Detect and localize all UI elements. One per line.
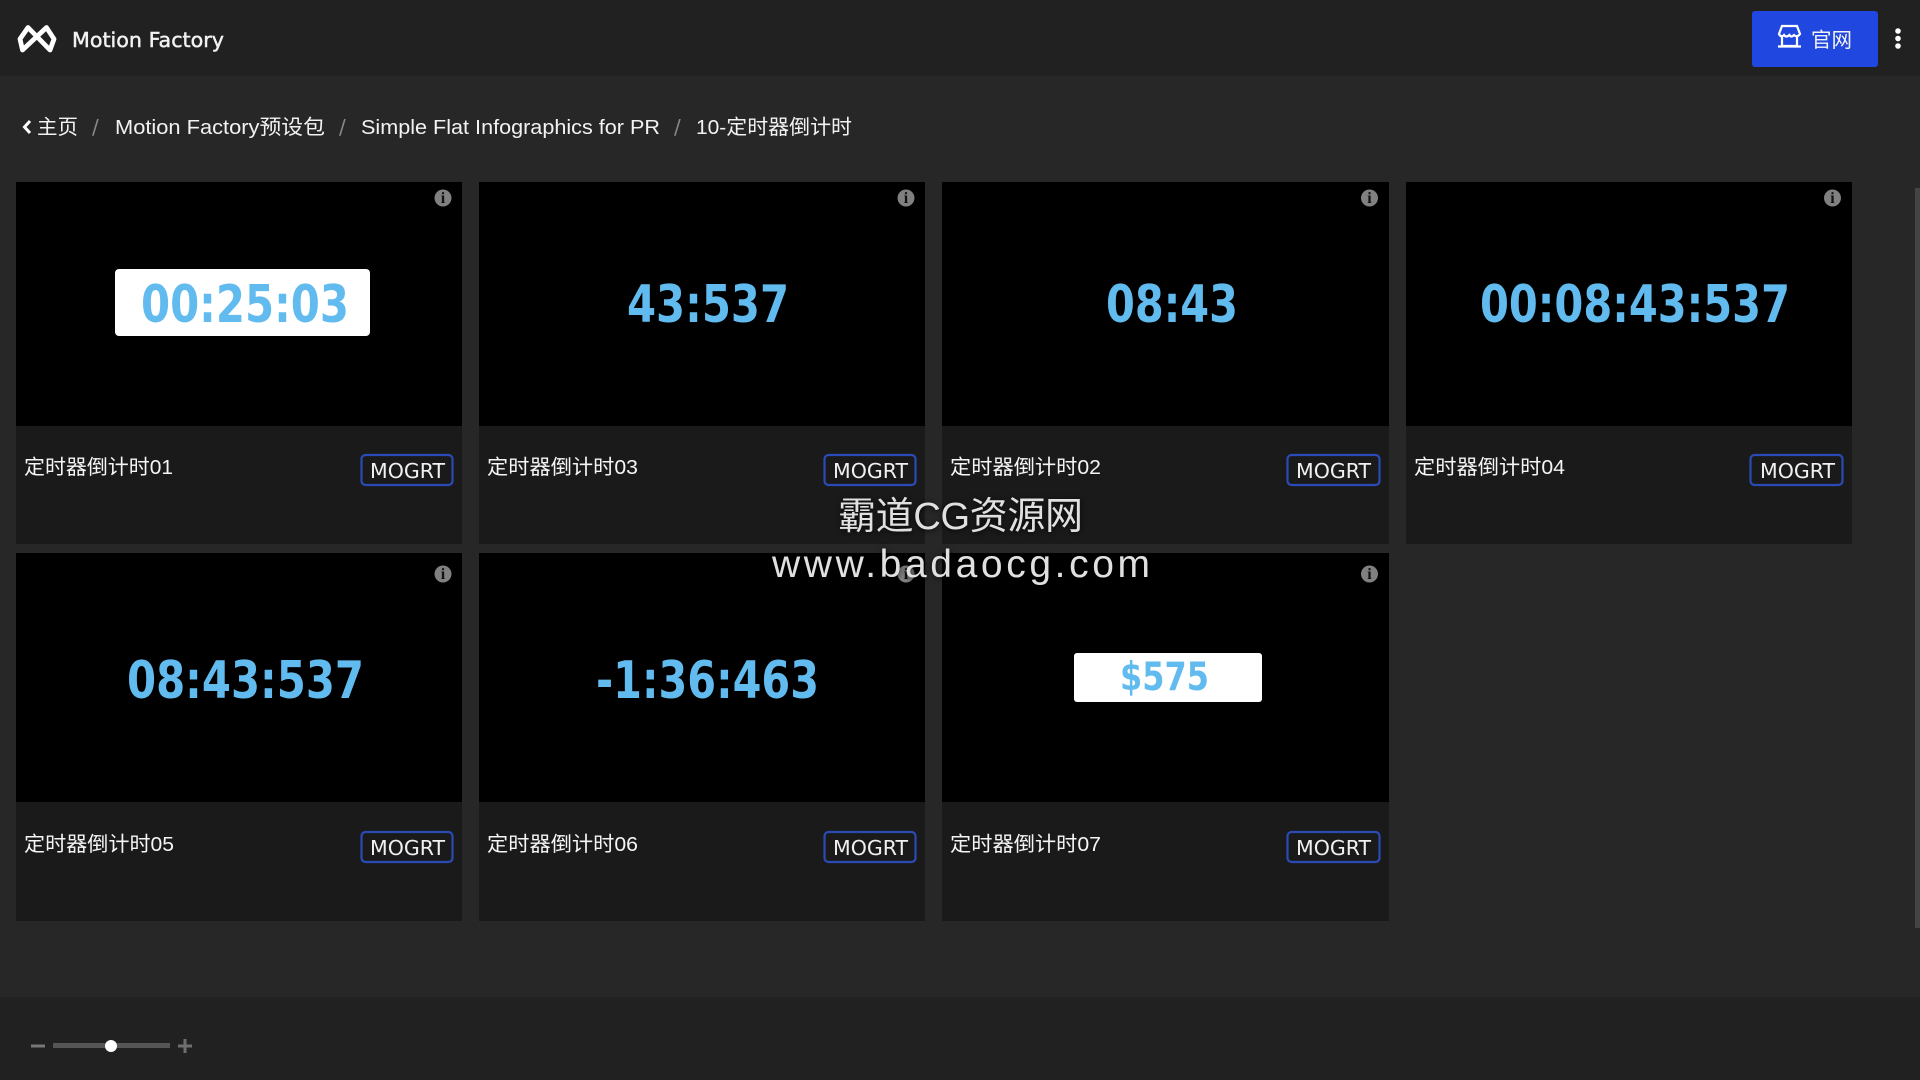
breadcrumb: / [674,115,681,139]
card: timer 01: 00:25:03 [141,275,349,335]
card: timer 04: 定时器倒计时04 [1414,456,1565,479]
card: timer 04: MOGRT [1760,459,1836,483]
card: timer 03: 43:537 [627,275,789,335]
card: timer 06: -1:36:463 [596,651,819,711]
card: timer 02: 08:43 [1106,275,1238,335]
card: timer 03 [479,182,925,544]
card: timer 03: i [904,190,909,207]
breadcrumb: 10-定时器倒计时 [696,116,852,139]
card: timer 02: i [1367,190,1372,207]
card: timer 05: 08:43:537 [127,651,364,711]
icon: more menu [1895,28,1901,49]
card: timer 01 [16,182,462,544]
card: timer 01: i [441,190,446,207]
icon: logo [20,28,54,50]
brand name: Motion Factory [72,28,224,52]
card: timer 03: 定时器倒计时03 [487,456,638,479]
card: timer 07 [942,553,1389,921]
card: timer 02 [942,182,1389,544]
scrollbar [1915,188,1920,928]
card: timer 02: 定时器倒计时02 [950,456,1101,479]
watermark: 霸道CG资源网 [838,496,1083,538]
zoom slider [53,1040,170,1052]
card: timer 06 [479,553,925,921]
official site button [1752,11,1878,67]
breadcrumb [24,115,852,139]
breadcrumb: / [92,115,99,139]
icon: store [1778,26,1801,46]
card: timer 05: MOGRT [370,836,446,860]
icon: zoom out [31,1044,45,1048]
card: timer 07: $575 [1120,655,1209,700]
breadcrumb: / [339,115,346,139]
card: timer 04: 00:08:43:537 [1480,275,1790,335]
card: timer 06: i [904,566,909,583]
breadcrumb: Simple Flat Infographics for PR [361,116,660,139]
card: timer 04 [1406,182,1852,544]
card: timer 05: 定时器倒计时05 [24,833,174,856]
breadcrumb: Motion Factory预设包 [115,116,325,139]
icon: zoom in [178,1039,192,1053]
watermark: www.badaocg.com [771,543,1150,586]
card: timer 07: i [1367,566,1372,583]
card: timer 06: 定时器倒计时06 [487,833,638,856]
card: timer 05: i [441,566,446,583]
header bar [0,0,1920,76]
card: timer 07: MOGRT [1296,836,1372,860]
card: timer 05 [16,553,462,921]
card: timer 02: MOGRT [1296,459,1372,483]
breadcrumb: 主页 [37,116,78,139]
card: timer 04: i [1830,190,1835,207]
card: timer 01: 定时器倒计时01 [24,456,173,479]
card: timer 03: MOGRT [833,459,909,483]
card: timer 06: MOGRT [833,836,909,860]
card: timer 07: 定时器倒计时07 [950,833,1101,856]
footer zoom bar [0,997,1920,1080]
watermark [771,496,1150,586]
button label: 官网 [1811,29,1852,52]
card: timer 01: MOGRT [370,459,446,483]
